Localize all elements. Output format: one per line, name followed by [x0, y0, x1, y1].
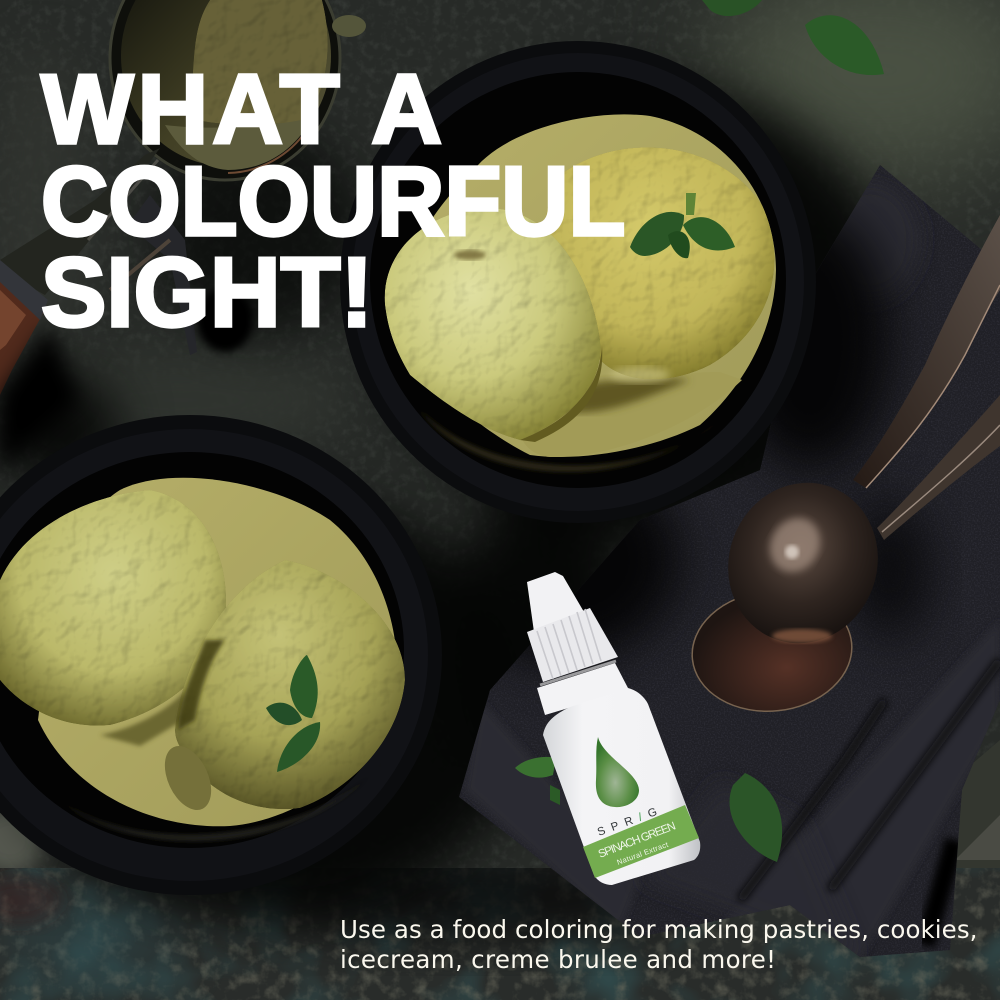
green label band [583, 805, 699, 878]
lower stone band with teal and rust patina [0, 868, 1000, 1000]
napkin [440, 150, 1000, 970]
caption: Use as a food coloring for making pastries, cookies, [340, 915, 978, 944]
dark cast shadow [0, 80, 895, 920]
bottle body [543, 688, 700, 885]
bottle [527, 572, 700, 885]
caption: icecream, creme brulee and more! [340, 945, 776, 974]
wooden handle [0, 260, 80, 470]
mint leaf: top right [805, 15, 884, 75]
title [38, 54, 625, 347]
mint garnish on bottom bowl [266, 655, 320, 772]
bowl: bottom left [0, 415, 442, 895]
product name: SPINACH GREEN [597, 820, 678, 861]
title: SIGHT! [41, 237, 373, 347]
scoop left [385, 208, 600, 440]
mint leaf: beside bottle [515, 757, 560, 805]
caption [340, 915, 978, 974]
collar [537, 663, 629, 715]
cream pool [400, 114, 776, 457]
mint garnish on top bowl [630, 193, 735, 258]
cream pool [38, 478, 397, 826]
brand name: SPR/G [596, 803, 668, 839]
top-left glass cup [110, 0, 366, 180]
scoop utensil [0, 148, 253, 355]
spoons [686, 215, 1000, 719]
bowl: top [340, 41, 816, 523]
pea [332, 15, 366, 37]
mint leaf: top edge [702, 0, 762, 16]
title: WHAT A [41, 54, 446, 164]
scoop right [545, 147, 774, 379]
bottle tip [527, 572, 584, 632]
scoop left [0, 490, 226, 726]
title: COLOURFUL [41, 146, 625, 256]
ribbed cap [527, 608, 618, 682]
drop logo [596, 737, 639, 807]
mint leaf: right of bottle [729, 773, 782, 862]
bottle: Natural Extract [616, 840, 670, 867]
scoop right [175, 560, 405, 809]
